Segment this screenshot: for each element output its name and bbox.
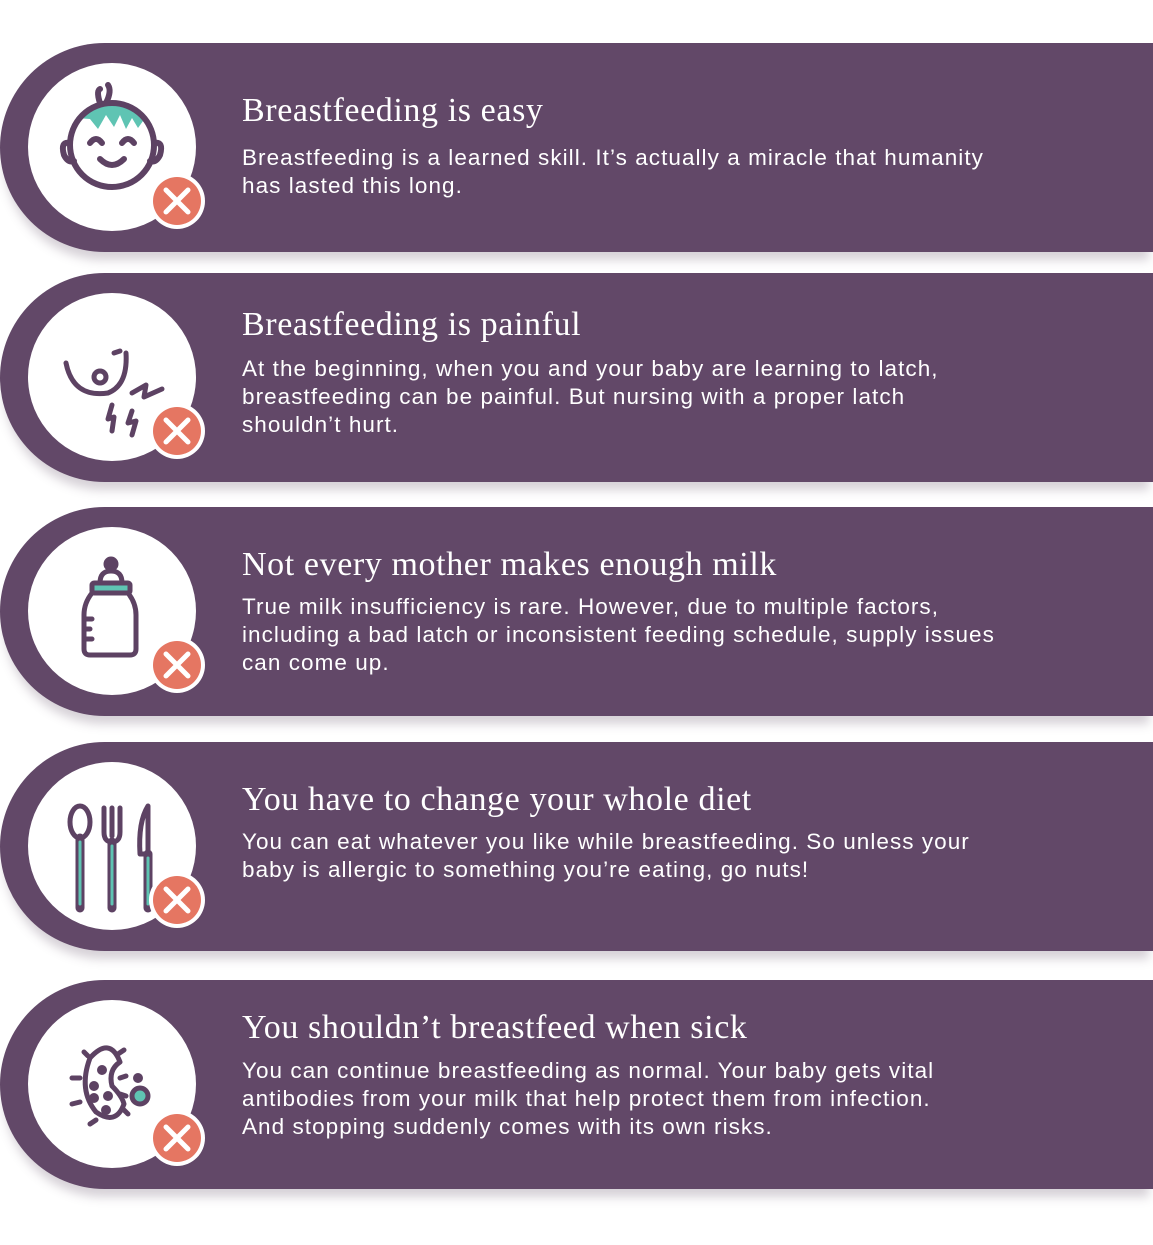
text: You can eat whatever you like while breastfeeding. So unless your — [242, 829, 970, 854]
icon: x badge — [153, 640, 205, 693]
text: shouldn’t hurt. — [242, 412, 399, 437]
text: You can continue breastfeeding as normal. Your baby gets vital — [242, 1058, 934, 1083]
panel: breastfeeding is painful — [0, 273, 1153, 482]
text: breastfeeding can be painful. But nursing with a proper latch — [242, 384, 905, 409]
text — [242, 145, 984, 198]
panel: change your diet — [0, 742, 1153, 951]
heading: Breastfeeding is easy — [242, 92, 544, 129]
icon: germ — [70, 1045, 150, 1126]
icon: bottle — [82, 556, 138, 658]
text: baby is allergic to something you’re eating, go nuts! — [242, 857, 809, 882]
panel: breastfeeding is easy — [0, 43, 1153, 252]
heading: Breastfeeding is painful — [242, 306, 581, 343]
panel: breastfeed when sick — [0, 980, 1153, 1189]
text: And stopping suddenly comes with its own risks. — [242, 1114, 773, 1139]
text: has lasted this long. — [242, 173, 463, 198]
text — [242, 1058, 934, 1139]
icon: baby face — [60, 82, 164, 190]
icon: x badge — [149, 876, 205, 928]
text: At the beginning, when you and your baby are learning to latch, — [242, 356, 939, 381]
icon: x badge — [153, 176, 205, 229]
text: can come up. — [242, 650, 390, 675]
heading: You have to change your whole diet — [242, 781, 752, 818]
icon: breast with pain — [64, 348, 164, 438]
text: including a bad latch or inconsistent feeding schedule, supply issues — [242, 622, 995, 647]
icon: x badge — [153, 1114, 205, 1166]
text: antibodies from your milk that help protect them from infection. — [242, 1086, 931, 1111]
text — [242, 594, 995, 675]
text: True milk insufficiency is rare. However, due to multiple factors, — [242, 594, 939, 619]
icon: cutlery — [68, 804, 152, 912]
text: Breastfeeding is a learned skill. It’s actually a miracle that humanity — [242, 145, 984, 170]
text — [242, 829, 970, 882]
heading: Not every mother makes enough milk — [242, 546, 777, 583]
heading: You shouldn’t breastfeed when sick — [242, 1009, 747, 1046]
text — [242, 356, 939, 437]
panel: not enough milk — [0, 507, 1153, 716]
icon: x badge — [153, 406, 205, 459]
